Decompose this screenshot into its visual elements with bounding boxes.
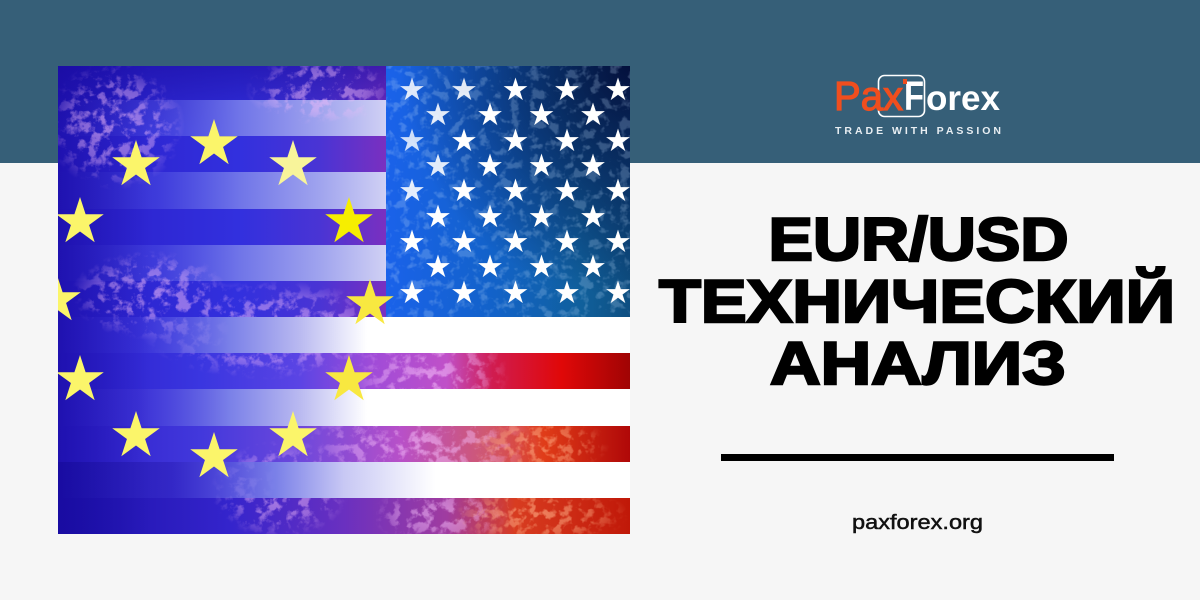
logo wordmark orex: orex xyxy=(926,79,1001,118)
title: ТЕХНИЧЕСКИЙ xyxy=(659,268,1175,335)
orange grunge texture xyxy=(458,426,624,534)
top shading xyxy=(58,66,386,105)
canton xyxy=(386,66,630,317)
divider line xyxy=(721,454,1114,461)
US stars xyxy=(400,78,630,303)
canton corner shade xyxy=(411,66,630,270)
logo tagline: TRADE WITH PASSION xyxy=(835,125,1001,137)
logo wordmark F: F xyxy=(904,73,924,119)
pink grunge texture xyxy=(58,66,536,534)
logo frame xyxy=(878,76,924,116)
title: АНАЛИЗ xyxy=(770,330,1066,397)
logo: PaxForex xyxy=(834,73,1001,137)
website url: paxforex.org xyxy=(852,512,983,534)
lower pale stripes xyxy=(144,317,630,498)
lower dark stripes xyxy=(58,317,630,534)
header band xyxy=(0,0,1200,163)
title: EUR/USD xyxy=(768,206,1068,273)
upper dark stripes xyxy=(58,66,386,317)
upper pale stripes xyxy=(106,100,386,281)
left edge shading xyxy=(58,66,126,462)
logo wordmark Pax: Pax xyxy=(834,73,903,119)
logo tick xyxy=(903,79,907,84)
flag image: EU and US flags blended xyxy=(33,66,630,534)
EU stars xyxy=(33,119,394,477)
title xyxy=(659,206,1175,397)
canton speckle xyxy=(386,66,630,317)
